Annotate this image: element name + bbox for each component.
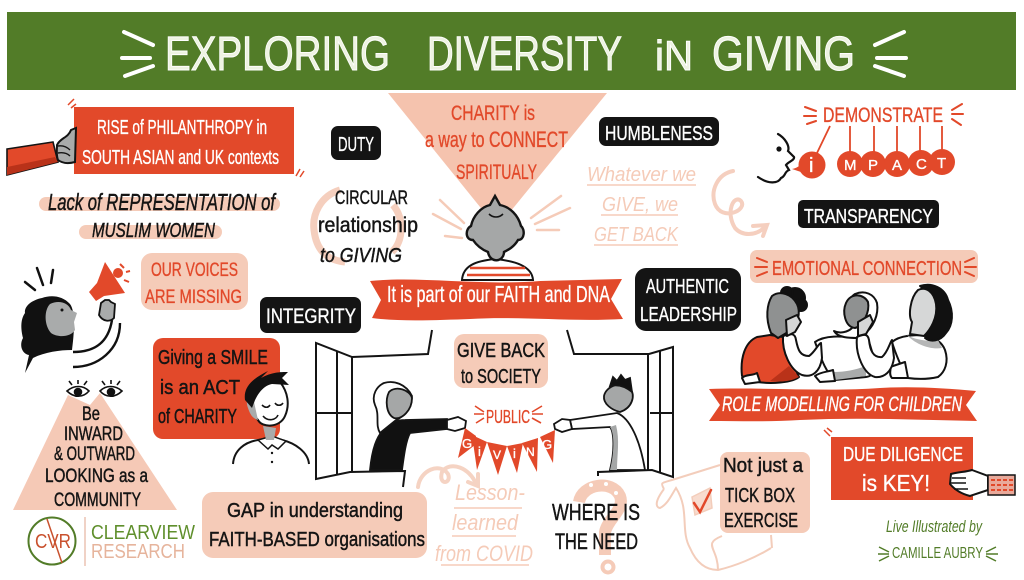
text: lesson learned from covid: learned [452, 510, 519, 535]
label: authentic leadership [635, 268, 741, 331]
panel: our voices are missing: OUR VOICES [151, 260, 238, 281]
chart: giving bunting: G [462, 436, 472, 451]
icon: question mark [579, 482, 621, 572]
panel: gap in understanding: GAP in understanding [227, 500, 403, 522]
icon: woman speaking [21, 268, 120, 373]
panel: give back to society [454, 334, 548, 388]
logo: clearview research: RESEARCH [91, 541, 185, 563]
logo: clearview research [28, 517, 195, 566]
icon: speaking face profile [758, 134, 794, 182]
chart: impact pendulum balls [792, 126, 955, 178]
panel: gap in understanding: FAITH-BASED organisations [209, 529, 425, 551]
label: authentic leadership: AUTHENTIC [646, 276, 729, 298]
icon: looking eyes [67, 380, 122, 396]
logo: clearview research: CLEARVIEW [91, 522, 195, 544]
panel: give back to society: to SOCIETY [461, 366, 541, 388]
text: whatever we give: GIVE, we [602, 194, 678, 216]
panel: rise of philanthropy [68, 99, 304, 177]
text: whatever we give: Whatever we [587, 164, 696, 186]
title: DIVERSITY [427, 28, 622, 81]
icon: hand with patterned sleeve [950, 470, 1015, 496]
panel: give back to society: GIVE BACK [457, 340, 546, 362]
illustration: smiling boy [233, 371, 309, 464]
chart: impact pendulum balls: M [844, 157, 856, 174]
text: public: PUBLIC [486, 407, 530, 427]
label: humbleness [599, 117, 719, 146]
chart: giving bunting: G [542, 437, 552, 452]
panel: not just a tick box exercise: Not just a [723, 455, 804, 477]
panel: not just a tick box exercise: TICK BOX [725, 485, 795, 507]
panel: our voices are missing [141, 253, 248, 310]
text: where is the need [552, 499, 640, 554]
title: iN [655, 32, 693, 79]
text: circular relationship to giving: relationship [318, 214, 418, 237]
text: circular relationship to giving: CIRCULAR [335, 188, 408, 209]
banner: faith and DNA: It is part of our FAITH and DNA [387, 281, 610, 307]
panel: charity triangle [388, 93, 607, 228]
credit: live illustrated by: Live Illustrated by [886, 517, 983, 536]
illustration: right window [567, 330, 673, 477]
text: lack of representation [39, 189, 280, 242]
banner: role modelling for children [709, 387, 977, 421]
panel: charity triangle: a way to CONNECT [425, 127, 568, 152]
label: duty: DUTY [338, 134, 374, 156]
panel: due diligence: DUE DILIGENCE [843, 444, 963, 466]
panel: inward and outward triangle: INWARD [64, 424, 123, 445]
chart: impact pendulum balls: A [892, 157, 902, 174]
panel: rise of philanthropy: SOUTH ASIAN and UK contexts [82, 147, 279, 169]
panel: inward and outward triangle: Be [82, 404, 100, 425]
label: emotional connection [750, 250, 978, 283]
illustration: left window [316, 330, 432, 487]
title [165, 28, 855, 81]
panel: inward and outward triangle: LOOKING as a [45, 466, 148, 487]
icon: person looking up [433, 196, 570, 280]
text: lesson learned from covid: from COVID [435, 541, 533, 566]
credit: live illustrated by: CAMILLE AUBRY [892, 545, 983, 562]
illustration: man reaching [554, 375, 645, 470]
label: transparency [798, 200, 939, 228]
chart: giving bunting [458, 428, 555, 475]
label: duty [331, 126, 381, 160]
chart: impact pendulum balls: T [937, 155, 946, 172]
panel: gap in understanding [202, 492, 427, 558]
panel: giving a smile: is an ACT [160, 377, 240, 399]
panel: rise of philanthropy: RISE of PHILANTHROPY in [97, 117, 267, 139]
panel: due diligence [824, 428, 973, 500]
illustration: woman in headscarf reaching [370, 382, 466, 470]
panel: giving a smile [153, 338, 280, 439]
panel: not just a tick box exercise [720, 452, 810, 533]
panel: not just a tick box exercise: EXERCISE [724, 510, 798, 532]
chart: giving bunting: i [513, 446, 516, 461]
person: right, dark hair [890, 285, 952, 379]
text: where is the need: WHERE IS [552, 499, 640, 525]
text: circular relationship to giving [314, 188, 418, 267]
label: emotional connection: EMOTIONAL CONNECTION [772, 258, 962, 280]
text: whatever we give: GET BACK [594, 224, 679, 246]
banner: faith and DNA [370, 279, 623, 320]
chart: impact pendulum balls: C [916, 156, 927, 173]
title banner [7, 12, 1016, 90]
person: middle, headscarf [815, 292, 894, 382]
label: integrity: INTEGRITY [266, 305, 356, 328]
panel: due diligence: is KEY! [862, 470, 930, 496]
label: humbleness: HUMBLENESS [605, 123, 713, 145]
panel: giving a smile: of CHARITY [158, 406, 237, 428]
icon: scroll checklist [657, 465, 772, 570]
chart: giving bunting: V [493, 448, 501, 462]
text: lack of representation: MUSLIM WOMEN [92, 220, 215, 242]
chart: impact pendulum balls: P [868, 157, 878, 174]
logo: clearview research: CVR [35, 531, 71, 553]
panel: our voices are missing: ARE MISSING [145, 287, 242, 308]
chart: impact pendulum balls: i [809, 155, 813, 177]
panel: inward and outward triangle: & OUTWARD [54, 444, 135, 465]
text: lack of representation: Lack of REPRESENTATION of [48, 189, 277, 215]
panel: inward and outward triangle: COMMUNITY [54, 490, 141, 511]
label: integrity [260, 297, 361, 333]
chart: giving bunting: N [526, 445, 535, 459]
text: demonstrate: DEMONSTRATE [823, 104, 943, 127]
panel: charity triangle: CHARITY is [451, 102, 535, 125]
icon: megaphone [89, 262, 130, 301]
text: lesson learned from covid: Lesson- [455, 480, 525, 505]
credit: live illustrated by [878, 517, 998, 562]
label: transparency: TRANSPARENCY [804, 206, 933, 228]
icon: pointing arm [7, 128, 76, 175]
panel: charity triangle: SPIRITUALY [456, 161, 537, 184]
panel: inward and outward triangle [13, 393, 177, 511]
text: lesson learned from covid [435, 480, 533, 566]
text: where is the need: THE NEED [555, 529, 638, 554]
label: authentic leadership: LEADERSHIP [640, 304, 737, 326]
person: left, red top [742, 287, 822, 384]
arrow: curly pink [714, 171, 767, 236]
arrow: swirl to lesson learned [418, 466, 478, 487]
illustration: three people [742, 285, 952, 384]
panel: giving a smile: Giving a SMILE [158, 347, 268, 369]
chart: giving bunting: i [478, 444, 481, 459]
text: whatever we give [587, 164, 696, 246]
title: GIVING [712, 28, 855, 81]
title: EXPLORING [165, 28, 390, 81]
text: circular relationship to giving: to GIVING [320, 245, 402, 267]
